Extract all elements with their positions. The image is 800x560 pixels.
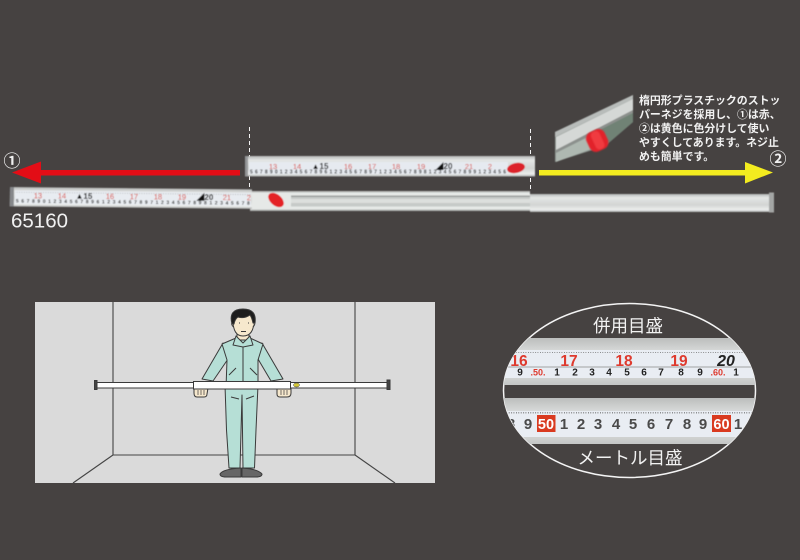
upper red numbers: 16 [510,353,528,370]
description text: ②は黄色に色分けして使い [639,121,769,135]
lower black digits: 8 [683,416,691,433]
ruler numbers: 2 [488,162,492,171]
person in work uniform holding rod [194,309,291,477]
shoes [220,468,241,477]
torso [222,338,263,388]
upper small scale digits [518,368,739,376]
red knob [584,127,611,154]
collar [233,336,253,347]
ears [232,322,255,327]
label: combined scale: 併用目盛 [593,316,663,336]
ruler numbers [269,162,492,171]
description text: パーネジを採用し、①は赤、 [639,107,781,121]
lower black digits: 9 [524,416,532,433]
legs [225,385,258,468]
tape numbers: 18 [154,192,162,201]
lower black digits [510,419,742,429]
lower black digits: 6 [647,416,655,433]
ruler numbers: 16 [344,162,352,171]
tape numbers: 21 [223,193,231,202]
upper strip: combined scale [500,338,760,385]
label: metre scale: メートル目盛 [578,448,682,468]
fists [194,388,208,397]
face details [239,323,249,332]
upper small scale digits: 1 [733,368,739,378]
room lines [73,302,395,483]
outer thin tube [530,194,773,212]
upper small scale digits: 7 [658,368,664,378]
horizontal rod [94,380,390,390]
tape numbers: 17 [130,192,138,201]
red arrow pointing left [12,162,240,184]
upper red numbers [511,355,688,366]
description text: やすくしてあります。ネジ止 [639,135,779,149]
circled number 2: ② [770,145,786,170]
lower black digits: 8 [507,416,515,433]
extended measuring rod [10,187,774,212]
red boxed 50: 50 [538,417,554,433]
lower black digits: 4 [612,416,621,433]
lower black digits: 1 [734,416,742,433]
tape digits: 5 6 7 8 9 0 1 2 3 4 5 6 7 8 9 6 1 2 3 4 5 6 7 8 9 7 1 2 3 4 5 6 7 8 9 8 1 2 3 4 5 6 7 8 [16,199,250,207]
lower black digits: 9 [699,416,707,433]
upper small scale digits: 2 [572,368,578,378]
hair [231,309,255,324]
tape numbers: 19 [178,193,186,202]
ruler logos: ▲15 [312,162,329,171]
lower black digits: 2 [577,416,585,433]
panel: usage illustration [35,302,435,483]
upper red numbers: 18 [615,353,633,370]
lower strip: metre scale [500,398,760,444]
upper small scale digits: 5 [624,368,630,378]
ruler logos [312,162,453,171]
description text [639,93,781,163]
tape numbers [34,191,251,202]
tape numbers: 2 [247,193,251,202]
yellow stopper [294,383,300,387]
dashed guide lines [250,127,530,191]
upper small scale digits: 9 [517,368,523,378]
collapsed measuring rod [245,156,535,176]
upper small scale digits: 9 [697,368,703,378]
model number: 65160 [11,210,68,232]
ruler numbers: 14 [293,162,301,171]
black logo number: 20 [716,353,735,370]
circled number 1: ① [4,147,20,172]
neck [237,331,249,340]
ruler numbers: 18 [392,162,400,171]
red stopper screw [506,161,526,175]
upper small scale digits: 1 [554,368,560,378]
ruler numbers: 17 [368,162,376,171]
upper red numbers: 17 [560,353,578,370]
tape numbers: 13 [34,191,42,200]
ruler numbers: 19 [417,162,425,171]
upper small scale digits: .60. [710,368,726,378]
pockets and folds [229,368,257,399]
head [233,312,254,336]
lower black digits: 5 [629,416,637,433]
arms [202,343,228,381]
sleeve [250,191,530,211]
ruler numbers: 13 [269,162,277,171]
lower black digits: 7 [665,416,673,433]
magnified scale oval [500,304,760,478]
upper small scale digits: 8 [678,368,684,378]
extended tape [10,187,252,209]
red boxed 60: 60 [713,417,730,433]
yellow arrow pointing right [539,162,773,184]
tape numbers: 16 [106,192,114,201]
ruler logos: ◢20 [436,162,453,171]
ruler numbers: 21 [465,162,473,171]
lower black digits: 1 [560,416,568,433]
tape logos [75,192,214,202]
description text: 楕円形プラスチックのストッ [639,93,780,107]
red stopper screw [266,190,286,210]
description text: めも簡単です。 [639,149,714,163]
tape numbers: 14 [58,191,66,201]
upper small scale digits: .50. [530,368,546,378]
ruler digits: 5 6 7 8 9 0 1 2 3 4 5 6 7 8 9 6 1 2 3 4 5 6 7 8 9 7 1 2 3 4 5 6 7 8 9 8 1 2 3 4 5 6 7 8 9 9 1 2 3 4 5 6 [250,170,506,176]
upper small scale digits: 6 [641,368,647,378]
upper red numbers: 19 [670,353,688,370]
inset photo: oval stopper screw [555,95,633,162]
tape logos: ◢20 [196,193,214,202]
upper small scale digits: 4 [606,368,612,378]
lower black digits: 3 [594,416,602,433]
upper small scale digits: 3 [589,368,595,378]
tape logos: ▲15 [75,192,93,201]
